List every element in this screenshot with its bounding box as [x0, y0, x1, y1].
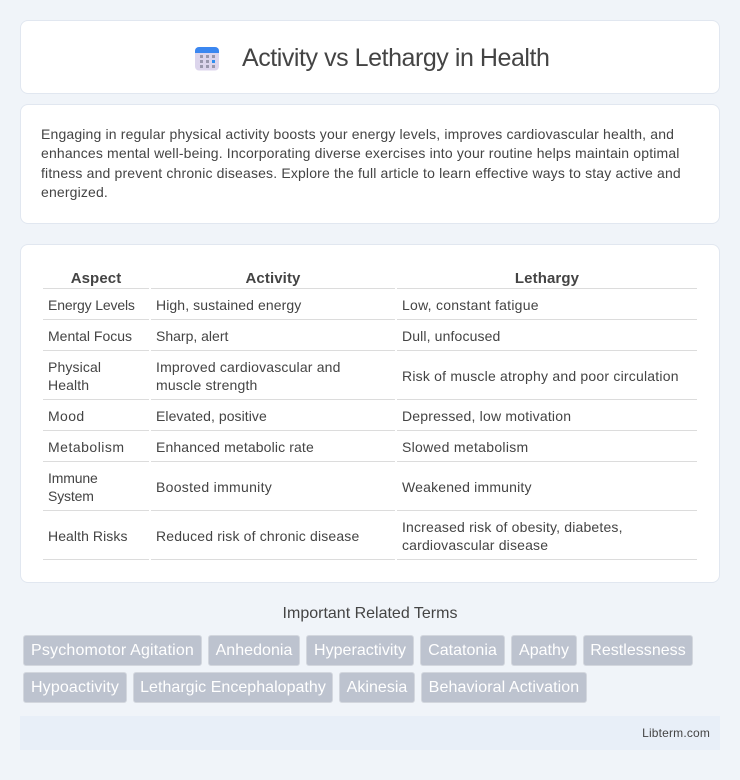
tag: Apathy: [519, 642, 569, 659]
tag: Hypoactivity: [31, 679, 119, 696]
row: immune system: [48, 470, 532, 504]
row: mood: Elevated, positive: [156, 408, 267, 424]
row: physical health: Health: [48, 377, 89, 393]
header panel: [20, 20, 720, 94]
intro paragraph: [41, 126, 681, 200]
tag: [23, 635, 202, 666]
row: immune system: Immune: [48, 470, 98, 486]
title: Activity vs Lethargy in Health: [242, 44, 549, 72]
tag: [511, 635, 577, 666]
tag: [583, 635, 693, 666]
tag: Behavioral Activation: [429, 679, 579, 696]
tag: [306, 635, 414, 666]
intro paragraph: Engaging in regular physical activity boosts your energy levels, improves cardiovascular health, and: [41, 126, 674, 142]
table header: Activity: [246, 270, 300, 287]
panel: comparison table: [20, 244, 720, 583]
row: metabolism: Metabolism: [48, 439, 125, 455]
row: energy levels: Energy Levels: [48, 297, 135, 313]
row: mental focus: Mental Focus: [48, 328, 132, 344]
tag: Lethargic Encephalopathy: [140, 679, 326, 696]
tag: Anhedonia: [216, 642, 292, 659]
intro paragraph: fitness and prevent chronic diseases. Explore the full article to learn effective ways to stay active and: [41, 165, 681, 181]
row: physical health: muscle strength: [156, 377, 258, 393]
row: health risks: [48, 519, 623, 553]
footer bar: [20, 716, 720, 750]
row: immune system: Weakened immunity: [402, 479, 532, 495]
tag: Akinesia: [347, 679, 407, 696]
tag: [339, 672, 415, 703]
icon: calendar: [195, 47, 219, 70]
row: energy levels: Low, constant fatigue: [402, 297, 539, 313]
intro paragraph: enhances mental well-being. Incorporating diverse exercises into your routine helps maintain optimal: [41, 145, 680, 161]
intro paragraph: energized.: [41, 184, 108, 200]
row: mood: Mood: [48, 408, 85, 424]
row: metabolism: Slowed metabolism: [402, 439, 528, 455]
footer credit: Libterm.com: [642, 726, 710, 740]
tag: Catatonia: [428, 642, 497, 659]
row: energy levels: High, sustained energy: [156, 297, 301, 313]
row: metabolism: [48, 439, 528, 455]
tag: [133, 672, 333, 703]
table header: [71, 270, 579, 287]
row: health risks: Reduced risk of chronic disease: [156, 528, 359, 544]
table header: Lethargy: [515, 270, 579, 287]
row: physical health: Risk of muscle atrophy and poor circulation: [402, 368, 679, 384]
row: mental focus: Dull, unfocused: [402, 328, 500, 344]
row: physical health: [48, 359, 679, 393]
row: mood: [48, 408, 571, 424]
row: health risks: cardiovascular disease: [402, 537, 548, 553]
row: mental focus: Sharp, alert: [156, 328, 228, 344]
row: health risks: Increased risk of obesity, diabetes,: [402, 519, 623, 535]
row: mood: Depressed, low motivation: [402, 408, 571, 424]
tag: Restlessness: [590, 642, 686, 659]
row: physical health: Improved cardiovascular and: [156, 359, 341, 375]
tag: [23, 672, 127, 703]
row: physical health: Physical: [48, 359, 101, 375]
tag: [208, 635, 300, 666]
heading: related terms: Important Related Terms: [283, 605, 457, 622]
tag: [420, 635, 505, 666]
table header: Aspect: [71, 270, 121, 287]
intro text panel: [20, 104, 720, 224]
tag: [421, 672, 587, 703]
row: immune system: Boosted immunity: [156, 479, 272, 495]
row: health risks: Health Risks: [48, 528, 128, 544]
tag: Hyperactivity: [314, 642, 406, 659]
row: metabolism: Enhanced metabolic rate: [156, 439, 314, 455]
related term tags: [23, 635, 693, 703]
row: energy levels: [48, 297, 539, 313]
row: mental focus: [48, 328, 500, 344]
row: immune system: System: [48, 488, 94, 504]
tag: Psychomotor Agitation: [31, 642, 194, 659]
